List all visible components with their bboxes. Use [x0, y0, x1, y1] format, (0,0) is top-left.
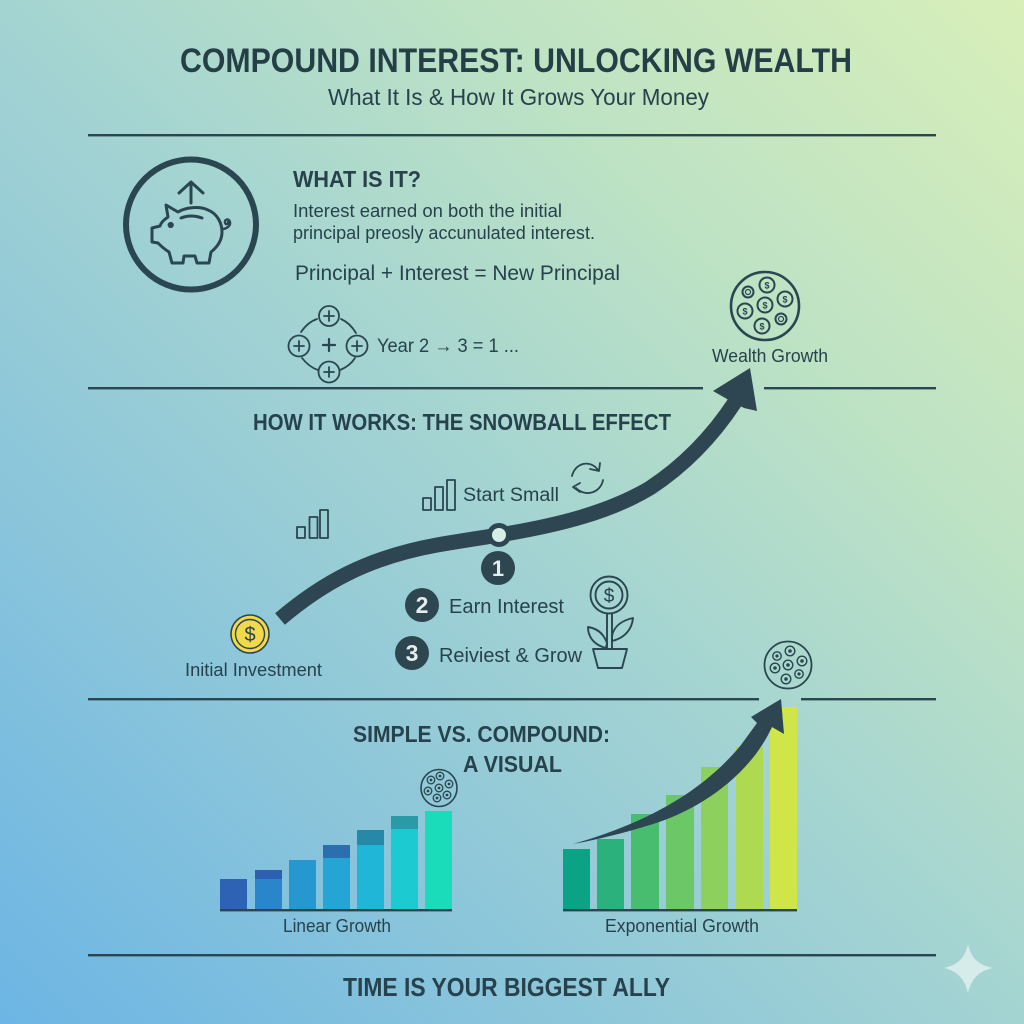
label: wealth growth: Wealth Growth: [712, 346, 828, 366]
heading: simple vs compound: A VISUAL: [463, 751, 562, 777]
step 2: Earn Interest: [449, 595, 564, 618]
heading: how it works: HOW IT WORKS: THE SNOWBALL EFFECT: [253, 409, 671, 435]
icon: coin cluster large: $: [759, 322, 765, 332]
icon: sparkle: [944, 944, 993, 993]
icon: plus cycle: [288, 306, 368, 382]
definition text: Interest earned on both the initial: [293, 200, 562, 221]
step 3: [395, 636, 582, 670]
year sequence text: Year 2 → 3 = 1 ...: [377, 336, 519, 357]
step 2: 2: [416, 592, 428, 618]
heading: simple vs compound: SIMPLE VS. COMPOUND:: [353, 721, 610, 747]
step 3: 3: [406, 640, 418, 666]
definition text: [293, 200, 595, 243]
chart: linear growth bars: [220, 811, 452, 911]
icon: piggy bank in ring: [126, 160, 256, 290]
icon: cycle arrows: [572, 463, 603, 493]
curve node: [487, 523, 511, 547]
step 3: Reiviest & Grow: [439, 644, 582, 667]
heading: what is it: WHAT IS IT?: [293, 166, 421, 192]
icon: gold coin: [231, 615, 269, 653]
step 1 badge: [481, 551, 515, 585]
label: start small: Start Small: [463, 485, 559, 506]
exponential curve arrow: [573, 699, 784, 844]
divider lines: [88, 134, 936, 956]
icon: coin cluster large: $: [782, 294, 788, 304]
icon: money plant: [588, 576, 633, 668]
icon: coin cluster large: $: [742, 306, 748, 316]
icon: coin cluster large: $: [764, 280, 770, 290]
heading: simple vs compound: [353, 721, 610, 777]
chart: exponential growth bars: [563, 707, 797, 911]
formula: Principal + Interest = New Principal: [295, 262, 620, 285]
icon: coin cluster large: $: [762, 300, 768, 310]
label: exponential growth: Exponential Growth: [605, 916, 759, 936]
icon: coin cluster large: [731, 272, 799, 340]
icon: start small bars: [423, 480, 455, 510]
growth curve arrow: [280, 368, 757, 619]
label: linear growth: Linear Growth: [283, 916, 391, 936]
subtitle: What It Is & How It Grows Your Money: [328, 84, 709, 110]
step 1 badge: 1: [492, 556, 504, 581]
definition text: principal preosly accunulated interest.: [293, 222, 595, 243]
title: COMPOUND INTEREST: UNLOCKING WEALTH: [180, 42, 852, 80]
icon: money plant: $: [604, 586, 615, 607]
step 2: [405, 588, 564, 622]
label: initial investment: Initial Investment: [185, 660, 322, 680]
icon: gold coin: $: [244, 624, 256, 646]
icon: coin cluster left: [421, 770, 457, 806]
closing tagline: TIME IS YOUR BIGGEST ALLY: [343, 972, 670, 1002]
icon: coin cluster right: [764, 642, 812, 688]
icon: small bars: [297, 510, 328, 538]
